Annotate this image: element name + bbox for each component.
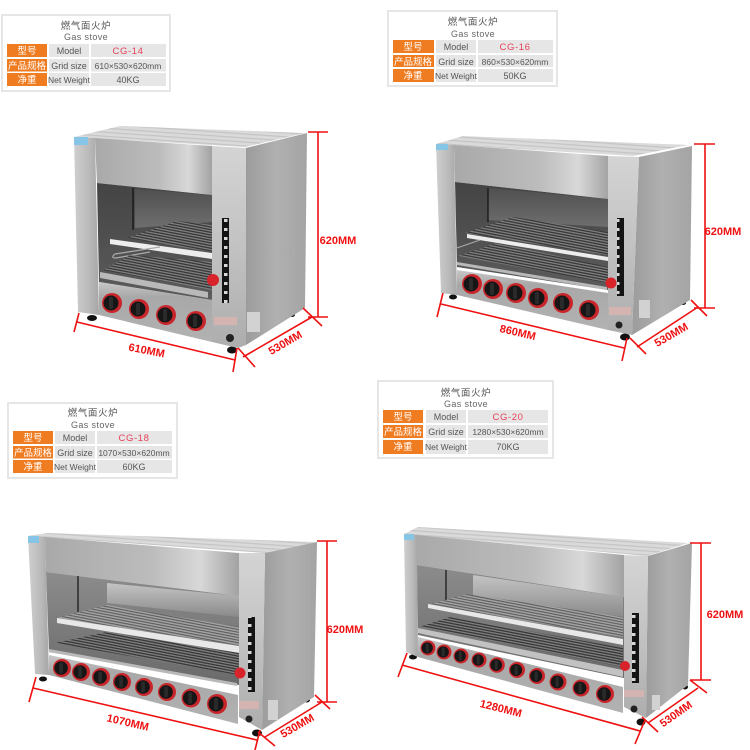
spec table: CG-16: Model xyxy=(444,42,468,52)
spec table: CG-14: 610×530×620mm xyxy=(95,61,161,71)
dimension lines: CG-14: 530MM xyxy=(267,329,304,358)
spec table: CG-16: 860×530×620mm xyxy=(482,57,548,67)
dimension lines: CG-20: 1280MM xyxy=(479,698,523,720)
spec table: CG-18: 60KG xyxy=(122,462,146,472)
spec table: CG-18: CG-18 xyxy=(119,433,149,444)
spec table: CG-16: Net Weight xyxy=(435,71,478,81)
stove illustration: CG-18 xyxy=(28,533,317,736)
spec table: CG-18: 产品规格 xyxy=(14,447,52,459)
spec table: CG-20: 1280×530×620mm xyxy=(472,427,544,437)
spec table: CG-14: 40KG xyxy=(116,75,140,85)
spec table: CG-20: Net Weight xyxy=(425,442,468,452)
spec table: CG-20: 燃气面火炉 xyxy=(441,387,491,399)
dimension lines: CG-18 xyxy=(29,541,363,750)
spec table: CG-16: Gas stove xyxy=(451,29,495,39)
spec table: CG-14: Model xyxy=(57,46,81,56)
spec table: CG-20 xyxy=(378,381,553,458)
spec table: CG-16: Grid size xyxy=(438,57,474,67)
stove illustration: CG-14 xyxy=(74,126,307,354)
spec table: CG-16 xyxy=(388,11,557,86)
dimension lines: CG-18: 1070MM xyxy=(105,712,150,734)
spec table: CG-14: 燃气面火炉 xyxy=(61,20,111,32)
spec table: CG-20: 70KG xyxy=(496,442,520,452)
spec table: CG-20: CG-20 xyxy=(493,412,523,423)
spec table: CG-18: 1070×530×620mm xyxy=(98,448,170,458)
dimension lines: CG-20: 530MM xyxy=(658,699,695,730)
spec table: CG-18: Gas stove xyxy=(71,420,115,430)
dimension lines: CG-18: 620MM xyxy=(327,624,363,636)
spec table: CG-16: CG-16 xyxy=(500,42,530,53)
dimension lines: CG-14: 620MM xyxy=(320,235,356,247)
spec table: CG-20: 净重 xyxy=(393,441,413,453)
spec table: CG-20: Gas stove xyxy=(444,399,488,409)
spec table: CG-18: Net Weight xyxy=(54,462,97,472)
spec table: CG-16: 50KG xyxy=(503,71,527,81)
dimension lines: CG-20: 620MM xyxy=(707,609,743,621)
stove illustration: CG-20 xyxy=(404,527,692,726)
spec table: CG-16: 产品规格 xyxy=(394,56,432,68)
spec table: CG-16: 燃气面火炉 xyxy=(448,16,498,28)
spec table: CG-14: 型号 xyxy=(17,46,37,57)
spec table: CG-16: 型号 xyxy=(403,42,423,53)
spec table: CG-18: 净重 xyxy=(23,461,43,473)
dimension lines: CG-16: 860MM xyxy=(498,323,537,343)
dimension lines: CG-16: 620MM xyxy=(705,226,741,238)
spec table: CG-20: 产品规格 xyxy=(384,426,422,438)
spec table: CG-20: Grid size xyxy=(428,427,464,437)
spec table: CG-16: 净重 xyxy=(403,70,423,82)
spec table: CG-20: 型号 xyxy=(393,412,413,423)
spec table: CG-14: Grid size xyxy=(51,61,87,71)
dimension lines: CG-18: 530MM xyxy=(279,712,316,741)
stove illustration: CG-16 xyxy=(436,136,692,340)
dimension lines: CG-20 xyxy=(398,543,743,744)
spec table: CG-14: CG-14 xyxy=(113,46,143,57)
spec table: CG-18: 型号 xyxy=(23,433,43,444)
spec table: CG-14 xyxy=(2,15,170,91)
spec table: CG-14: Net Weight xyxy=(48,75,91,85)
spec table: CG-18: Grid size xyxy=(57,448,93,458)
dimension lines: CG-14 xyxy=(74,132,356,372)
dimension lines: CG-14: 610MM xyxy=(127,342,166,360)
spec table: CG-20: Model xyxy=(434,412,458,422)
spec table: CG-14: 产品规格 xyxy=(8,60,46,72)
spec table: CG-14: Gas stove xyxy=(64,32,108,42)
dimension lines: CG-16 xyxy=(437,144,741,361)
dimension lines: CG-16: 530MM xyxy=(653,321,690,350)
spec table: CG-14: 净重 xyxy=(17,74,37,86)
spec table: CG-18: 燃气面火炉 xyxy=(68,407,118,419)
spec table: CG-18: Model xyxy=(63,433,87,443)
spec table: CG-18 xyxy=(8,403,177,478)
